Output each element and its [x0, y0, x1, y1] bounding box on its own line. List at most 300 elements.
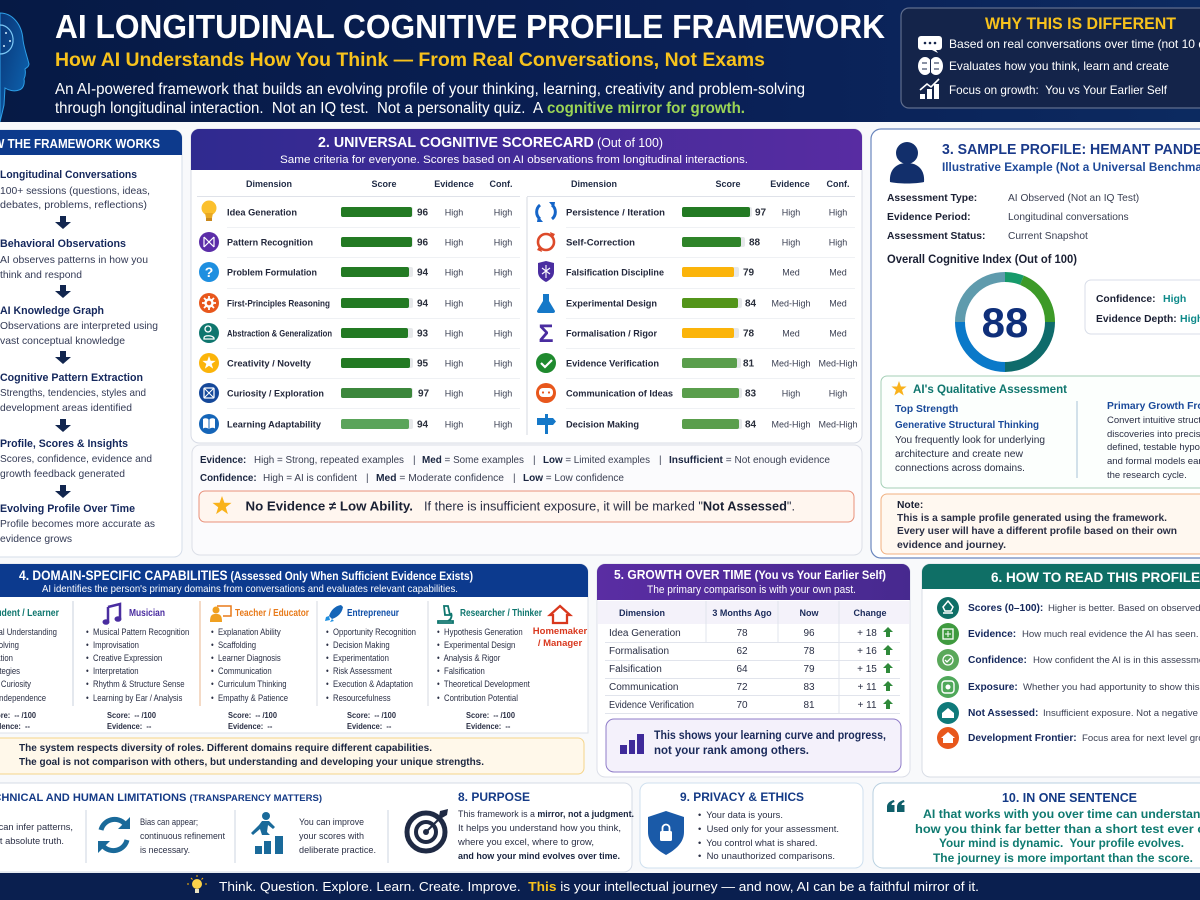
heading 2: 2. UNIVERSAL COGNITIVE SCORECARD (Out of 100): [318, 134, 663, 151]
row: Idea Generation: [202, 200, 512, 221]
column: researcher / thinker: [437, 606, 542, 731]
row: Evidence Verification: [536, 353, 858, 373]
panel: why this is different: [901, 8, 1200, 108]
icon: gold star: [212, 496, 232, 514]
callout: learning curve: This shows your learning curve and progress,: [654, 730, 886, 742]
icon: shield with padlock: [648, 811, 684, 855]
arrow 3: [55, 351, 71, 364]
icon: house: [550, 606, 570, 623]
header banner: [0, 0, 1200, 122]
panel 2: universal cognitive scorecard: [191, 129, 862, 443]
column: researcher / thinker: Score: -- /100: [466, 711, 515, 720]
row: Self-Correction: Self-Correction: [566, 238, 635, 248]
footer text: Think. Question. Explore. Learn. Create. Improve. This is your intellectual journey — and now, AI can be a faithful mirror of it.: [219, 880, 979, 894]
overall index heading: Overall Cognitive Index (Out of 100): [887, 254, 1077, 266]
privacy list: [698, 810, 839, 861]
row: Falsification: Falsification: [609, 664, 662, 675]
column: researcher / thinker: • Hypothesis Generation: [437, 626, 523, 637]
row: First-Principles Reasoning: High: [494, 298, 512, 308]
purpose text: This framework is a mirror, not a judgment.: [458, 809, 634, 819]
icon: pattern: [199, 232, 219, 252]
heading 10: 10. IN ONE SENTENCE: [1002, 791, 1137, 805]
panel 7 and 8: limitations and purpose: [0, 783, 634, 872]
row: Problem Formulation: 94: [417, 268, 429, 278]
icon: brain: [918, 57, 943, 75]
row: Communication of Ideas: High: [782, 388, 800, 398]
table header left: Dimension: [246, 179, 292, 189]
callout: no evidence: No Evidence ≠ Low Ability.: [246, 498, 413, 514]
table: growth: 3 Months Ago: [712, 608, 772, 618]
heading 4: 4. DOMAIN-SPECIFIC CAPABILITIES (Assessed Only When Sufficient Evidence Exists): [19, 568, 473, 583]
row: Creativity / Novelty: [199, 353, 512, 373]
icon: abstraction: [199, 323, 219, 343]
panel: AI's qualitative assessment: [881, 376, 1200, 488]
column: entrepreneur: • Opportunity Recognition: [326, 626, 416, 637]
column: musician: Score: -- /100: [107, 711, 156, 720]
sentence: how you think far better than a short test ever can.: [915, 822, 1200, 836]
row: Falsification: 64: [736, 664, 748, 675]
row: Curiosity / Exploration: [199, 383, 512, 403]
assessment details: [887, 193, 1139, 242]
icon: refresh circle: [537, 232, 555, 252]
row: Communication: + 11: [858, 682, 877, 693]
sentence: Your mind is dynamic. Your profile evolves.: [939, 836, 1184, 850]
evidence legend: Low = Limited examples: [543, 455, 650, 466]
icon: quotation mark: [887, 800, 904, 812]
step 3: vast conceptual knowledge: [0, 336, 125, 347]
icon: bars: [620, 734, 644, 754]
row: Idea Generation: High: [494, 208, 512, 218]
row: Abstraction & Generalization: High: [494, 328, 512, 338]
icon: star: [891, 381, 907, 395]
table header right: Evidence: [770, 179, 810, 189]
step 2: [0, 238, 148, 281]
step 5: Scores, confidence, evidence and: [0, 454, 152, 465]
evidence legend: [200, 455, 831, 466]
gauge: overall index 88: 88: [982, 299, 1028, 346]
column: teacher / educator: • Explanation Ability: [211, 626, 282, 637]
row: Idea Generation: Idea Generation: [609, 628, 681, 639]
icon: rocket: [325, 605, 343, 622]
evidence legend: Med = Some examples: [422, 455, 524, 466]
note: diversity of roles: [0, 738, 584, 774]
row: Evidence Verification: Med-High: [818, 358, 858, 368]
row: Pattern Recognition: 96: [417, 238, 429, 248]
row: exposure: Whether you had apportunity to show this.: [1023, 682, 1200, 693]
row: Falsification Discipline: Med: [829, 268, 847, 278]
icon: teacher: [210, 606, 231, 622]
row: Formalisation: + 16: [857, 646, 877, 657]
row: Communication: 83: [803, 682, 815, 693]
confidence legend: Med = Moderate confidence: [376, 473, 505, 484]
step 2: AI observes patterns in how you: [0, 255, 148, 266]
table: growth: [598, 601, 909, 714]
column: homemaker / manager: Homemaker: [533, 626, 587, 637]
column: musician: [86, 604, 190, 731]
row: Experimental Design: [537, 294, 847, 313]
row: Pattern Recognition: High: [445, 238, 463, 248]
confidence box: Confidence:: [1096, 294, 1156, 305]
column: student / learner: [0, 607, 59, 731]
icon: glowing AI head: [0, 13, 29, 122]
row: Communication of Ideas: 83: [745, 388, 757, 400]
step 4: development areas identified: [0, 403, 132, 414]
row: Falsification Discipline: 79: [743, 268, 755, 278]
row: confidence: [937, 649, 1200, 671]
row: Formalisation / Rigor: [538, 320, 847, 348]
table: growth: Dimension: [619, 608, 665, 618]
confidence legend: High = AI is confident: [263, 473, 357, 484]
row: Evidence Verification: Evidence Verification: [609, 700, 694, 711]
table header left: Conf.: [490, 179, 512, 189]
panel: evidence and confidence legend: [192, 445, 862, 555]
assessment details: Longitudinal conversations: [1008, 212, 1129, 223]
row: Pattern Recognition: [199, 232, 512, 252]
panel 10: in one sentence: [873, 783, 1200, 868]
callout: no evidence: [199, 491, 854, 522]
sentence: The journey is more important than the score.: [933, 851, 1193, 865]
purpose text: It helps you understand how you think,: [458, 823, 621, 833]
column: teacher / educator: • Learner Diagnosis: [211, 652, 281, 663]
arrow 1: [55, 216, 71, 229]
table header left: [246, 179, 512, 189]
row: Evidence Verification: Med-High: [771, 358, 811, 368]
column: entrepreneur: • Decision Making: [326, 639, 390, 650]
column: musician: • Musical Pattern Recognition: [86, 626, 190, 637]
row: Formalisation: Formalisation: [609, 646, 669, 657]
column: teacher / educator: Teacher / Educator: [235, 608, 309, 619]
row: Creativity / Novelty: High: [445, 358, 463, 368]
row: evidence: Evidence:: [968, 629, 1016, 640]
row: Creativity / Novelty: 95: [417, 358, 429, 370]
row: Formalisation / Rigor: Med: [829, 328, 847, 338]
why text 2: Evaluates how you think, learn and create: [949, 59, 1169, 73]
row: Problem Formulation: High: [494, 268, 512, 278]
column: teacher / educator: Score: -- /100: [228, 711, 277, 720]
row: Communication of Ideas: [536, 383, 847, 403]
row: Evidence Verification: Evidence Verification: [566, 358, 659, 370]
row: Learning Adaptability: [199, 414, 512, 434]
row: Pattern Recognition: Pattern Recognition: [227, 238, 313, 248]
evidence legend: |: [413, 455, 416, 466]
row: Idea Generation: High: [445, 208, 463, 218]
note: diversity of roles: The goal is not comparison with others, but understanding and developing your unique strengths.: [19, 756, 484, 768]
row: Abstraction & Generalization: 93: [417, 328, 429, 340]
limitation 1 text: [0, 822, 73, 846]
purpose text: [457, 809, 634, 861]
icon: avatar: [890, 142, 924, 184]
callout: learning curve: [606, 719, 901, 772]
icon: sigma: Σ: [538, 320, 554, 348]
column: researcher / thinker: • Contribution Potential: [437, 692, 518, 703]
subheading 2: Same criteria for everyone. Scores based on AI observations from longitudinal interactions.: [280, 154, 748, 166]
icon: check circle: [536, 353, 556, 373]
icon: flask: [537, 294, 555, 313]
intro text: cognitive mirror for growth.: [547, 100, 745, 117]
row: Learning Adaptability: High: [445, 420, 463, 430]
row: Curiosity / Exploration: High: [494, 388, 512, 398]
icon: light bulb: [202, 200, 216, 221]
row: Decision Making: Med-High: [818, 420, 858, 430]
column: entrepreneur: • Resourcefulness: [326, 692, 391, 703]
limitation 2 text: [140, 817, 225, 855]
row: Decision Making: Med-High: [771, 420, 811, 430]
row: Idea Generation: 96: [803, 628, 815, 639]
column: teacher / educator: [210, 606, 309, 731]
row: Falsification Discipline: Falsification Discipline: [566, 268, 664, 278]
row: Communication of Ideas: Communication of Ideas: [566, 388, 673, 400]
title: AI LONGITUDINAL COGNITIVE PROFILE FRAMEWORK: [55, 8, 885, 45]
column: teacher / educator: • Scaffolding: [211, 639, 256, 650]
row: Falsification: [609, 663, 893, 675]
row: Curiosity / Exploration: Curiosity / Exploration: [227, 388, 324, 400]
arrow 2: [55, 285, 71, 298]
heading 8: 8. PURPOSE: [458, 790, 530, 804]
icon: music notes: [102, 604, 122, 625]
subheading 5: The primary comparison is with your own past.: [647, 584, 856, 596]
row: Evidence Verification: [609, 699, 893, 711]
table: growth: Now: [800, 608, 819, 618]
row: Experimental Design: 84: [745, 298, 757, 310]
intro text: [55, 81, 805, 117]
step 2: Behavioral Observations: [0, 238, 126, 250]
row: Learning Adaptability: High: [494, 420, 512, 430]
row: Decision Making: 84: [745, 420, 757, 430]
arrow 4: [55, 419, 71, 432]
row: Evidence Verification: + 11: [858, 700, 877, 711]
step 6: [0, 503, 155, 545]
icon: chat bubble: [918, 36, 942, 53]
row: scores: Scores (0–100):: [968, 603, 1043, 614]
table header right: Conf.: [826, 179, 850, 189]
row: Curiosity / Exploration: High: [445, 388, 463, 398]
column: homemaker / manager: [533, 606, 587, 649]
table: growth: Change: [853, 608, 887, 618]
column: researcher / thinker: • Theoretical Development: [437, 678, 530, 689]
step 5: growth feedback generated: [0, 469, 125, 480]
step 3: AI Knowledge Graph: [0, 305, 104, 317]
table header left: Score: [371, 179, 397, 189]
confidence legend: Confidence:: [200, 473, 257, 484]
panel 4: domain-specific capabilities: [0, 564, 588, 733]
row: Formalisation / Rigor: Formalisation / Rigor: [566, 328, 657, 340]
privacy list: • You control what is shared.: [698, 838, 818, 848]
primary growth frontier: [1107, 401, 1200, 481]
row: Experimental Design: Med: [829, 298, 847, 308]
sentence: AI that works with you over time can understand: [923, 807, 1200, 821]
row: not assessed: Not Assessed:: [968, 708, 1038, 719]
assessment details: Evidence Period:: [887, 212, 971, 223]
row: Formalisation: 62: [736, 646, 748, 657]
column: researcher / thinker: • Experimental Design: [437, 639, 516, 650]
confidence legend: |: [513, 473, 516, 484]
row: Idea Generation: 96: [417, 208, 429, 218]
icon: gear: [199, 293, 219, 313]
table header right: [571, 179, 850, 189]
row: Self-Correction: High: [782, 238, 800, 248]
sentence: [915, 807, 1200, 865]
confidence box: Evidence Depth:: [1096, 314, 1177, 325]
icon: person climbing bars: [251, 812, 283, 854]
confidence box: High: [1163, 293, 1186, 305]
row: Abstraction & Generalization: High: [445, 328, 463, 338]
step 5: Profile, Scores & Insights: [0, 438, 128, 450]
limitation 3 text: deliberate practice.: [299, 845, 376, 855]
panel: AI's qualitative assessment: AI's Qualitative Assessment: [913, 384, 1067, 396]
row: development frontier: [937, 727, 1200, 749]
top strength: Top Strength: [895, 404, 958, 415]
heading 5: 5. GROWTH OVER TIME (You vs Your Earlier Self): [614, 567, 886, 582]
icon: speech: [536, 383, 556, 403]
column: researcher / thinker: Researcher / Thinker: [460, 608, 542, 619]
row: First-Principles Reasoning: [199, 293, 512, 313]
evidence legend: |: [659, 455, 662, 466]
row: Self-Correction: High: [829, 238, 847, 248]
icon: signpost: [537, 414, 556, 434]
row: Falsification Discipline: [538, 261, 847, 282]
note box: This is a sample profile generated using the framework.: [897, 513, 1167, 524]
row: Idea Generation: + 18: [857, 628, 877, 639]
column: entrepreneur: Entrepreneur: [347, 608, 399, 619]
evidence legend: |: [533, 455, 536, 466]
row: Creativity / Novelty: High: [494, 358, 512, 368]
note box: evidence and journey.: [897, 540, 1006, 551]
column: teacher / educator: • Communication: [211, 665, 272, 676]
top strength: Generative Structural Thinking: [895, 420, 1039, 431]
row: Idea Generation: [609, 627, 893, 639]
top strength: You frequently look for underlying: [895, 435, 1045, 446]
note box: [881, 494, 1200, 554]
limitation 2 text: is necessary.: [140, 845, 190, 855]
row: scores: [937, 597, 1200, 619]
row: Curiosity / Exploration: 97: [418, 388, 430, 400]
top strength: [895, 404, 1045, 474]
row: Persistence / Iteration: High: [782, 208, 800, 218]
row: Falsification: 79: [803, 664, 815, 675]
column: musician: Musician: [129, 608, 165, 619]
limitation 2 text: continuous refinement: [140, 831, 225, 841]
row: Persistence / Iteration: 97: [755, 208, 767, 218]
column: teacher / educator: • Curriculum Thinking: [211, 678, 287, 689]
assessment details: AI Observed (Not an IQ Test): [1008, 193, 1139, 204]
column: entrepreneur: Score: -- /100: [347, 711, 396, 720]
note: diversity of roles: The system respects diversity of roles. Different domains require different capabilities.: [19, 742, 432, 754]
intro text: through longitudinal interaction. Not an IQ test. Not a personality quiz. A: [55, 100, 544, 117]
row: confidence: Confidence:: [968, 655, 1027, 666]
primary growth frontier: the research cycle.: [1107, 470, 1187, 481]
column: entrepreneur: [325, 605, 416, 731]
confidence box: [1085, 280, 1200, 334]
icon: question bubble: [199, 262, 219, 282]
limitation 3 text: your scores with: [299, 831, 364, 841]
icon: target: [407, 809, 448, 851]
column: musician: • Rhythm & Structure Sense: [86, 678, 185, 689]
row: Evidence Verification: 81: [803, 700, 815, 711]
row: Idea Generation: Idea Generation: [227, 208, 297, 218]
row: Communication of Ideas: High: [829, 388, 847, 398]
row: Evidence Verification: 81: [743, 358, 755, 370]
row: First-Principles Reasoning: High: [445, 298, 463, 308]
heading: why this is different: WHY THIS IS DIFFERENT: [985, 14, 1177, 33]
icon: star: [199, 353, 219, 373]
callout: no evidence: If there is insufficient exposure, it will be marked " Not Assessed".: [424, 500, 795, 514]
icon: refresh: [98, 817, 130, 853]
top strength: architecture and create new: [895, 449, 1024, 460]
column: musician: Evidence: --: [107, 722, 152, 731]
column: teacher / educator: • Empathy & Patience: [211, 692, 288, 703]
heading 9: 9. PRIVACY & ETHICS: [680, 790, 804, 804]
subtitle: How AI Understands How You Think — From Real Conversations, Not Exams: [55, 50, 765, 71]
confidence legend: [200, 473, 625, 484]
row: Decision Making: [537, 414, 858, 434]
evidence legend: High = Strong, repeated examples: [254, 455, 404, 466]
step 1: 100+ sessions (questions, ideas,: [0, 186, 150, 197]
column: homemaker / manager: / Manager: [538, 638, 582, 649]
row: Pattern Recognition: High: [494, 238, 512, 248]
evidence legend: Insufficient = Not enough evidence: [669, 455, 831, 466]
row: Creativity / Novelty: Creativity / Novelty: [227, 358, 312, 370]
row: Communication: 72: [736, 682, 748, 693]
row: Abstraction & Generalization: [199, 323, 512, 343]
icon: growth chart: [920, 79, 939, 99]
row: Learning Adaptability: 94: [417, 420, 429, 430]
assessment details: Assessment Type:: [887, 193, 977, 204]
panel 9: privacy and ethics: [640, 783, 863, 868]
why text 3: Focus on growth: You vs Your Earlier Self: [949, 83, 1168, 97]
subheading 4: AI identifies the person's primary domains from conversations and evaluates relevant capabilities.: [42, 583, 458, 595]
step 1: Longitudinal Conversations: [0, 169, 137, 181]
row: Evidence Verification: 70: [736, 700, 748, 711]
row: Abstraction & Generalization: Abstraction & Generalization: [227, 328, 332, 340]
column: entrepreneur: • Risk Assessment: [326, 665, 392, 676]
row: Formalisation / Rigor: 78: [743, 328, 755, 340]
row: Problem Formulation: High: [445, 268, 463, 278]
column: entrepreneur: • Experimentation: [326, 652, 389, 663]
row: Self-Correction: 88: [749, 238, 761, 248]
panel 3: sample profile: [871, 129, 1200, 558]
icon: microscope: [438, 606, 453, 623]
row: Falsification: + 15: [857, 664, 877, 675]
limitation 3 text: You can improve: [299, 817, 364, 827]
row: evidence: [937, 623, 1199, 645]
icon: shield: [538, 261, 554, 282]
row: exposure: [937, 676, 1200, 698]
icon: question bubble: ?: [205, 264, 213, 280]
column: researcher / thinker: • Analysis & Rigor: [437, 652, 500, 663]
column: musician: • Learning by Ear / Analysis: [86, 692, 182, 703]
row: Idea Generation: 78: [736, 628, 748, 639]
arrow 5: [55, 485, 71, 498]
row: Experimental Design: Experimental Design: [566, 298, 657, 310]
step 6: Evolving Profile Over Time: [0, 503, 135, 515]
step 1: debates, problems, reflections): [0, 200, 147, 211]
note box: Every user will have a different profile based on their own: [897, 526, 1177, 537]
column: entrepreneur: Evidence: --: [347, 722, 392, 731]
purpose text: where you excel, where to grow,: [457, 837, 594, 847]
row: Formalisation: [609, 645, 893, 657]
purpose text: and how your mind evolves over time.: [458, 851, 620, 861]
icon: light bulb: [187, 875, 207, 893]
row: Formalisation: 78: [803, 646, 815, 657]
row: Persistence / Iteration: Persistence / Iteration: [566, 208, 665, 218]
step 4: Strengths, tendencies, styles and: [0, 388, 146, 399]
icon: open book: [199, 414, 219, 434]
step 5: [0, 438, 152, 480]
column: entrepreneur: • Execution & Adaptation: [326, 678, 413, 689]
column: musician: • Improvisation: [86, 639, 139, 650]
row: First-Principles Reasoning: 94: [417, 298, 429, 310]
icon: loop arrows: [537, 202, 555, 222]
